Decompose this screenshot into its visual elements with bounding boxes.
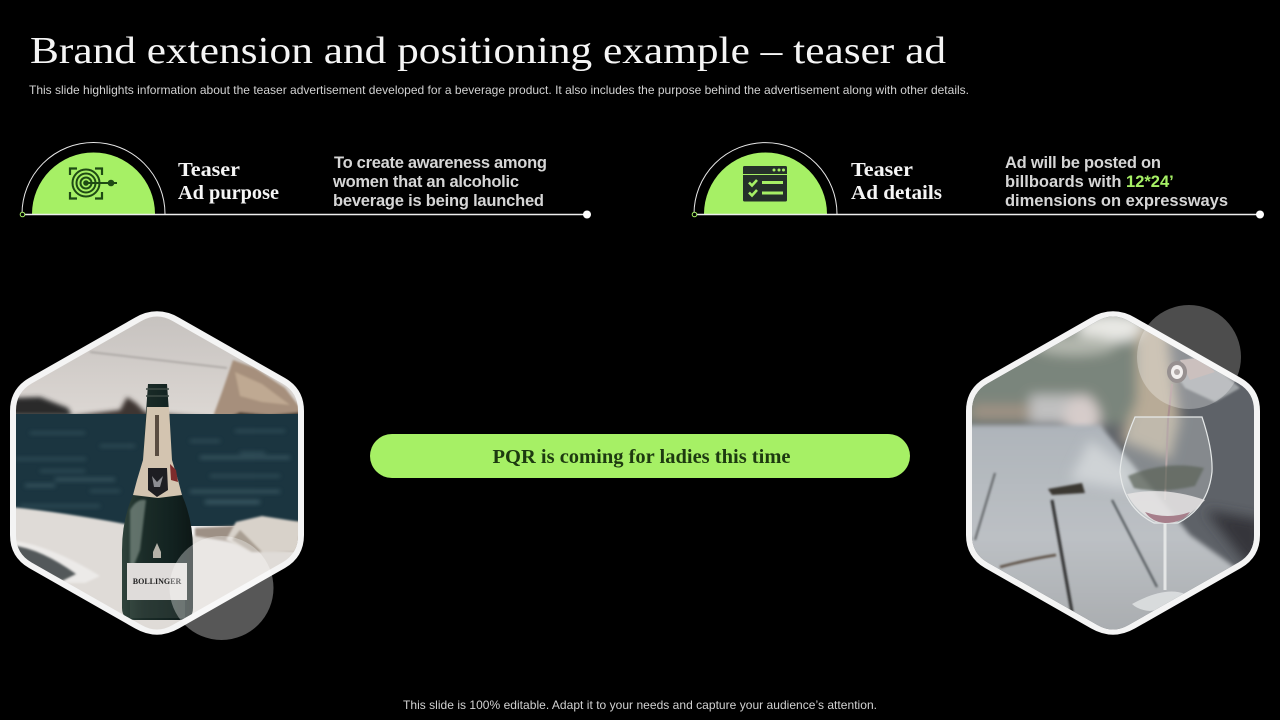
footer note: This slide is 100% editable. Adapt it to your needs and capture your audience’s attention.	[403, 698, 877, 712]
subtitle: This slide highlights information about the teaser advertisement developed for a beverage product. It also includes the purpose behind the advertisement along with other details.	[29, 83, 969, 97]
icon: browser checklist	[743, 166, 787, 202]
photo: wine being poured in hexagon	[960, 300, 1262, 650]
description: purpose: To create awareness among	[334, 154, 547, 172]
heading: teaser ad details: Ad details	[851, 182, 942, 204]
hexagon white frame	[10, 311, 304, 635]
description: details: Ad will be posted on	[1005, 154, 1161, 172]
heading: teaser ad purpose: Ad purpose	[178, 182, 279, 204]
baseline with end dot	[20, 210, 591, 218]
icon: target with arrow	[70, 168, 117, 198]
decorative translucent circle	[170, 536, 274, 640]
panel: teaser ad purpose	[20, 142, 591, 218]
heading: teaser ad details: Teaser	[851, 159, 913, 181]
decorative translucent circle	[1137, 305, 1241, 409]
table cracks	[975, 473, 1157, 612]
bottle	[122, 384, 193, 620]
semicircle badge	[22, 142, 165, 214]
callout: teaser message pill: PQR is coming for ladies this time	[492, 446, 791, 468]
description: purpose: beverage is being launched	[333, 192, 544, 210]
bottle: BOLLINGER	[133, 577, 181, 586]
description: details: billboards with	[1005, 173, 1126, 191]
wine scene	[972, 316, 1254, 630]
bottle scene	[16, 316, 298, 630]
description: purpose: women that an alcoholic	[332, 173, 519, 191]
semicircle badge	[694, 143, 837, 214]
hexagon white frame	[966, 311, 1260, 635]
baseline with end dot	[692, 210, 1264, 218]
wine glass	[1120, 417, 1212, 611]
description: details: 12*24’	[1126, 173, 1174, 191]
photo: champagne bottle in hexagon	[10, 305, 305, 640]
panel: teaser ad details	[692, 143, 1264, 218]
callout: teaser message pill	[370, 434, 910, 478]
pouring bottle	[1167, 358, 1240, 402]
description: details: dimensions on expressways	[1005, 192, 1228, 210]
title: Brand extension and positioning example – teaser ad	[30, 30, 946, 72]
heading: teaser ad purpose: Teaser	[178, 159, 240, 181]
